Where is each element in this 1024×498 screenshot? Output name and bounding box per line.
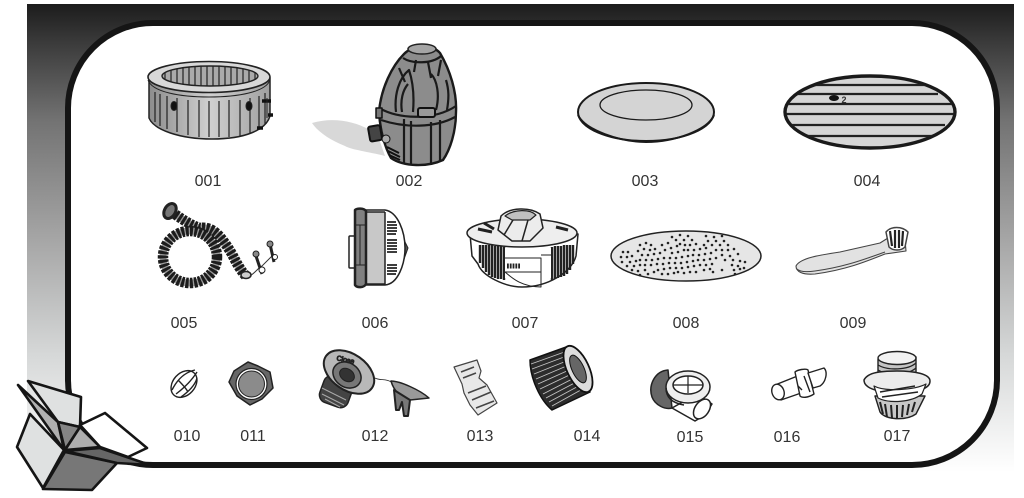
item 017: suction fitting [864, 352, 930, 419]
item labels: 002 [396, 173, 422, 190]
item labels: 007 [512, 315, 538, 332]
item labels: 004 [854, 173, 880, 190]
item labels: 010 [174, 428, 200, 445]
item labels: 017 [884, 428, 910, 445]
item 006: filter housing side view [349, 209, 408, 287]
item 014: cartridge filter [530, 342, 599, 410]
item 015: elbow drain [651, 370, 714, 422]
item 012: air valve pair [316, 341, 429, 416]
item labels: 012 [362, 428, 388, 445]
item 013: buckle [454, 360, 497, 415]
item 011: threaded cap [229, 362, 273, 405]
item labels: 009 [840, 315, 866, 332]
item labels: 001 [195, 173, 221, 190]
item labels: 015 [677, 429, 703, 446]
item 009: cleaning brush [796, 228, 908, 274]
item labels: 013 [467, 428, 493, 445]
item 007: filter pump base [467, 209, 578, 287]
item labels: 011 [240, 428, 266, 445]
item 003: round ground sheet [578, 83, 714, 142]
item labels: 003 [632, 173, 658, 190]
item 016: connector [770, 368, 826, 402]
item labels: 014 [574, 428, 600, 445]
item 005: coiled hose with clamps [161, 201, 278, 283]
item 004: round cover with straps [785, 76, 955, 148]
item 001: inflatable tub [148, 62, 273, 139]
item 008: perforated pad [611, 231, 761, 281]
item labels [171, 173, 910, 446]
item 002: pump with shadow [312, 44, 456, 165]
item 004: round cover with straps: 2 [841, 95, 847, 105]
item labels: 005 [171, 315, 197, 332]
item labels: 008 [673, 315, 699, 332]
item labels: 006 [362, 315, 388, 332]
icon: open box [17, 381, 150, 490]
item labels: 016 [774, 429, 800, 446]
item 012: air valve pair: Close [336, 355, 355, 366]
item 010: small cap [166, 365, 202, 403]
